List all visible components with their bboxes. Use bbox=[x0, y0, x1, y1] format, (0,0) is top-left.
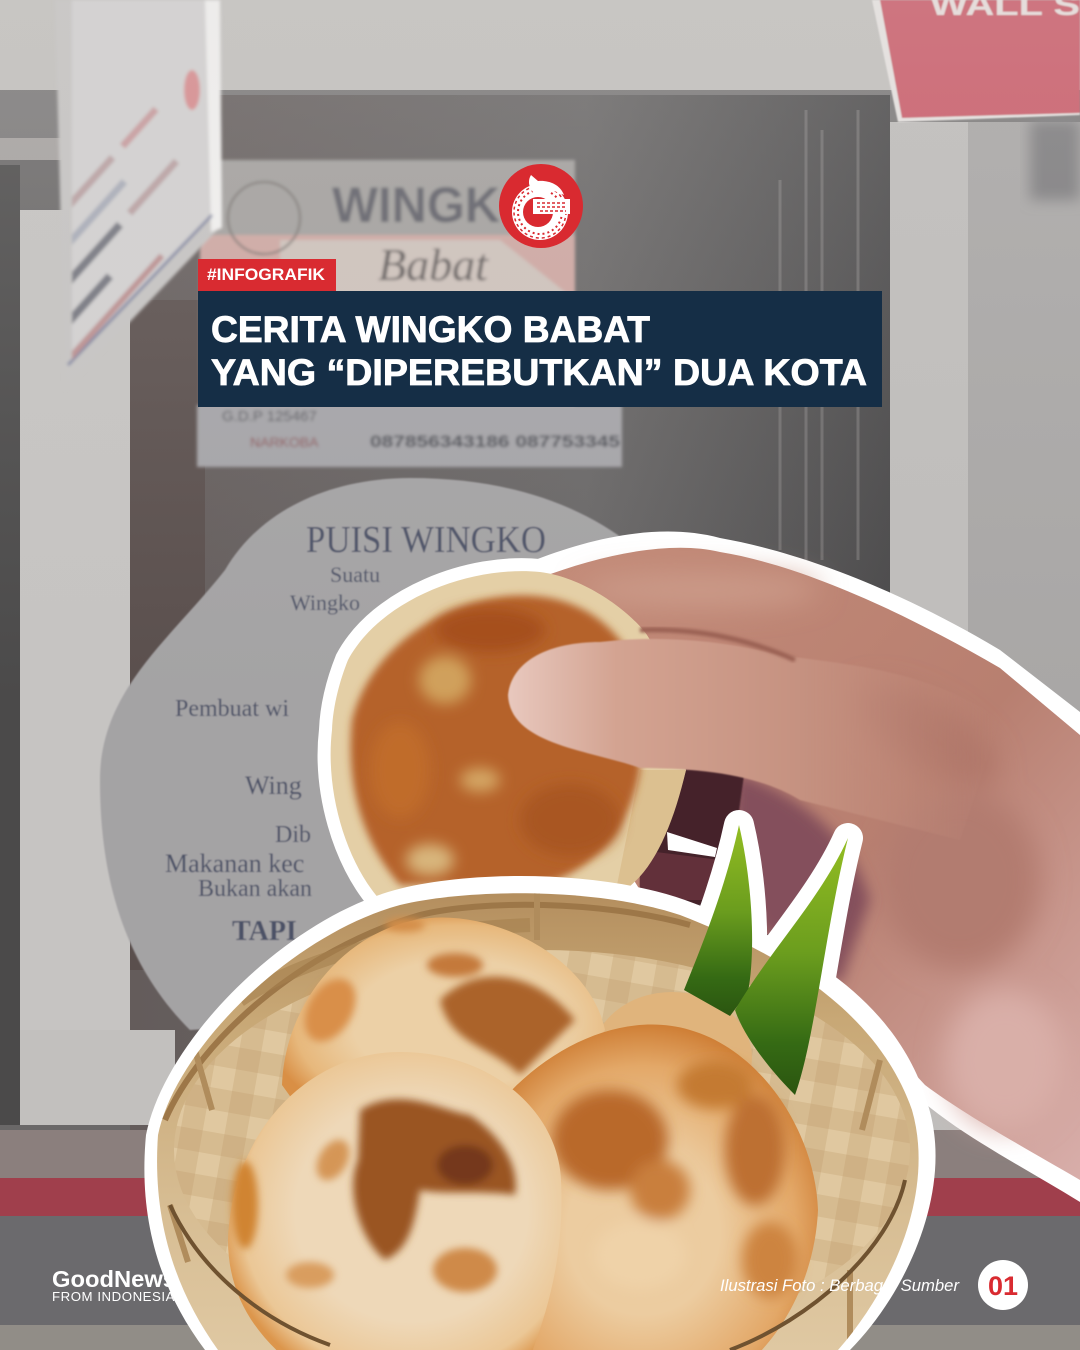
knuckle shading bbox=[580, 572, 1065, 1130]
basket rim bbox=[140, 880, 940, 1350]
shop sign: Wingko Babat: WINGK bbox=[332, 177, 500, 233]
thumb bbox=[508, 630, 1000, 840]
basket strand lines bbox=[170, 1205, 330, 1345]
left leaf bbox=[684, 825, 752, 1016]
rear wingko bbox=[604, 992, 752, 1066]
shop sign: Wingko Babat bbox=[197, 160, 622, 467]
footer left logo: GoodNews from Indonesia bbox=[52, 1266, 176, 1304]
wingko bottom right bbox=[500, 1025, 818, 1350]
shop sign: Wingko Babat: Babat bbox=[378, 239, 489, 290]
basket inner weave bbox=[174, 950, 908, 1293]
pandan leaf outlines bbox=[684, 825, 848, 1095]
stone plaque: Puisi Wingko bbox=[100, 478, 640, 1030]
wingko outline fragment bbox=[667, 832, 717, 857]
stone plaque: Puisi Wingko: PUISI WINGKO bbox=[306, 519, 546, 561]
hashtag label bbox=[198, 259, 336, 291]
hand with outline bbox=[500, 532, 1080, 1202]
bottom wood bbox=[480, 1320, 610, 1350]
held wingko bbox=[331, 571, 686, 900]
stone plaque: Puisi Wingko: Makanan kec bbox=[165, 849, 304, 878]
shop sign: Wingko Babat: 087856343186 087753345 bbox=[370, 432, 620, 451]
wingko crust bbox=[351, 596, 640, 885]
door slats bbox=[780, 110, 858, 560]
stone plaque: Puisi Wingko: Dib bbox=[275, 822, 311, 848]
wingko edge bbox=[331, 571, 686, 900]
mauve shadow under thumb bbox=[730, 772, 870, 985]
stone plaque: Puisi Wingko: Bukan akan bbox=[198, 876, 312, 902]
lower crevice tint bbox=[640, 850, 720, 900]
hand outline bbox=[500, 532, 1080, 1202]
stone plaque: Puisi Wingko: Wingko bbox=[290, 590, 360, 615]
shop sign: Wingko Babat: G.D.P 125467 bbox=[222, 408, 317, 425]
basket white outline bbox=[144, 876, 936, 1350]
stone plaque: Puisi Wingko: TAPI bbox=[232, 916, 297, 947]
pandan leaves bbox=[684, 825, 848, 1095]
stone plaque: Puisi Wingko: Wing bbox=[245, 771, 302, 800]
title line 2: YANG “DIPEREBUTKAN” DUA KOTA bbox=[211, 352, 867, 393]
shop sign: Wingko Babat: NARKOBA bbox=[250, 434, 319, 450]
page number badge bbox=[978, 1260, 1028, 1310]
basket with wingko bbox=[140, 876, 940, 1350]
footer left logo: GoodNews from Indonesia: GoodNews bbox=[52, 1266, 176, 1292]
dark crevice bbox=[640, 768, 745, 905]
wingko bottom left bbox=[228, 1052, 562, 1350]
hand skin bbox=[520, 548, 1080, 1180]
thumb crease bbox=[640, 630, 795, 660]
red banner top right bbox=[872, 0, 1080, 122]
right leaf bbox=[735, 838, 848, 1095]
footer left logo: GoodNews from Indonesia: FROM INDONESIA bbox=[52, 1290, 175, 1304]
hashtag label: #INFOGRAFIK bbox=[207, 265, 326, 284]
page number badge: 01 bbox=[988, 1271, 1018, 1301]
held wingko outline bbox=[331, 571, 686, 900]
hanging signboard bbox=[56, 0, 224, 366]
stone plaque: Puisi Wingko: Suatu bbox=[330, 562, 380, 587]
logo badge bbox=[499, 164, 583, 248]
pale right rim bbox=[615, 770, 686, 895]
title line 1: CERITA WINGKO BABAT bbox=[211, 309, 650, 350]
stone plaque: Puisi Wingko: Pembuat wi bbox=[175, 696, 289, 722]
fog overlay bbox=[0, 0, 1080, 700]
wingko top bbox=[282, 917, 605, 1110]
footer right: photo credit: Ilustrasi Foto : Berbagai Sumber bbox=[720, 1276, 960, 1295]
title panel bbox=[198, 291, 882, 407]
basket lashings bbox=[170, 892, 880, 1340]
